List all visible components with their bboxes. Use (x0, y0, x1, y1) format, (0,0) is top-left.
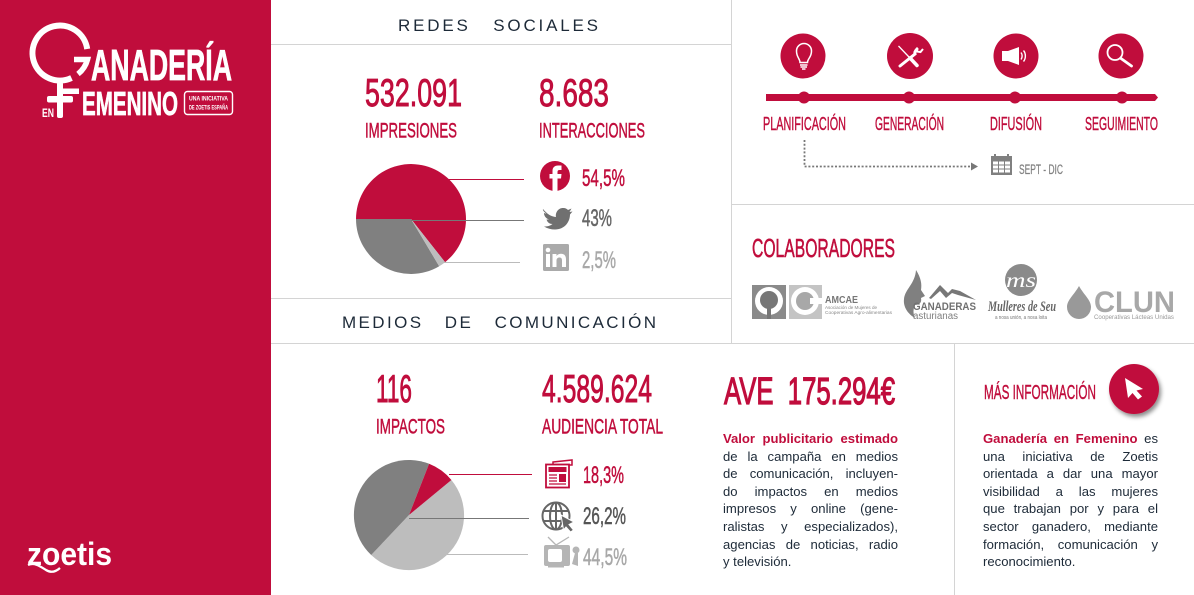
heading: medios de comunicación: MEDIOS DE COMUNICACIÓN (342, 313, 656, 332)
icon: tools (898, 46, 923, 66)
value: online: 26,2% (583, 503, 626, 530)
logo: AMCAE: Cooperativas Agro-alimentarias (825, 310, 893, 315)
icon: twitter (543, 208, 572, 230)
logo: Mulleres de Seu: ms (1006, 270, 1036, 292)
text: más información: visibilidad a las mujeres (983, 484, 1158, 499)
timeline labels: GENERACIÓN (875, 113, 944, 134)
icon: facebook (540, 161, 570, 191)
logo: Mulleres de Seu: a nosa unión, a nosa loita (995, 315, 1047, 321)
stat: impresiones (365, 72, 462, 142)
heading: redes sociales: REDES SOCIALES (398, 16, 598, 35)
text: valor publicitario: Valor publicitario estimado (723, 431, 898, 446)
logo: Mulleres de Seu (987, 264, 1056, 321)
logo: Ganadería en Femenino: EN (42, 106, 54, 120)
logo: Ganadería en Femenino: EMENINO (82, 85, 178, 122)
pie chart: medios de comunicación (354, 460, 532, 570)
logo: AMCAE (752, 285, 893, 319)
logo: Ganaderas asturianas: GANADERAS (913, 301, 976, 313)
logo: Mulleres de Seu: Mulleres de Seu (987, 299, 1056, 315)
timeline labels (763, 113, 1158, 134)
heading: colaboradores: COLABORADORES (752, 233, 895, 263)
text: más información: Ganadería en Femenino es (983, 431, 1158, 446)
stat: audiencia total: AUDIENCIA TOTAL (542, 414, 663, 438)
stat: impactos: IMPACTOS (376, 414, 445, 438)
text: más información: sector ganadero, mediante (983, 519, 1158, 534)
value: prensa: 18,3% (583, 462, 624, 489)
stat: impactos: 116 (376, 368, 412, 411)
text: más información: reconocimiento. (983, 554, 1075, 569)
stat: interacciones (539, 72, 645, 142)
logo: Ganaderas asturianas: asturianas (913, 311, 958, 322)
stat: interacciones: 8.683 (539, 72, 609, 115)
pie chart: redes sociales (356, 164, 524, 274)
text: más información: una iniciativa de Zoetis (983, 449, 1158, 464)
icon: speaker (1002, 47, 1025, 65)
timeline (766, 33, 1158, 104)
timeline labels: PLANIFICACIÓN (763, 113, 846, 134)
logo: Ganadería en Femenino: UNA INICIATIVA (189, 96, 228, 102)
logo: Ganaderas asturianas (904, 270, 976, 322)
text: más información (983, 431, 1158, 569)
button: cursor (1109, 364, 1159, 414)
stat: interacciones: INTERACCIONES (539, 118, 645, 142)
logo: AMCAE: Asociación de Mujeres de (825, 305, 877, 310)
logo: CLUN: Cooperativas Lácteas Unidas (1094, 315, 1174, 321)
heading: más información: MÁS INFORMACIÓN (984, 381, 1096, 404)
text: valor publicitario: y televisión. (723, 554, 791, 569)
text: más información: formación, comunicación y (983, 537, 1158, 552)
text: dates: SEPT - DIC (1019, 162, 1063, 177)
text: más información: orientada a dar una mayor (983, 466, 1158, 481)
text: valor publicitario: impresos y online (gene- (723, 501, 898, 516)
stat: impactos (376, 368, 445, 438)
stat: audiencia total: 4.589.624 (542, 368, 652, 411)
icon: television and microphone (544, 537, 580, 568)
stat: impresiones: 532.091 (365, 72, 462, 115)
stat: audiencia total (542, 368, 663, 438)
text: valor publicitario (723, 431, 898, 569)
text: valor publicitario: do impactos en medios (723, 484, 898, 499)
logo: CLUN: CLUN (1094, 286, 1175, 319)
logo: CLUN (1067, 286, 1175, 321)
logo: AMCAE: AMCAE (825, 295, 858, 306)
icon: globe with cursor (542, 502, 574, 532)
text: más información: que trabajan por y para el (983, 501, 1158, 516)
icon: newspaper (546, 460, 572, 488)
value: twitter: 43% (582, 205, 612, 232)
sidebar panel (0, 0, 271, 595)
text: valor publicitario: de la campaña en medios (723, 449, 898, 464)
arrow: dotted to dates (804, 140, 978, 170)
icon: linkedin (543, 244, 569, 271)
timeline labels: DIFUSIÓN (990, 113, 1042, 134)
logo: Ganadería en Femenino (32, 26, 233, 122)
stat: impresiones: IMPRESIONES (365, 118, 457, 142)
logo: Ganadería en Femenino: DE ZOETIS ESPAÑA (189, 102, 228, 112)
logo: Ganadería en Femenino: ANADERÍA (91, 40, 232, 90)
text: valor publicitario: agencias de noticias, radio (723, 537, 898, 552)
logo: zoetis: zoetis (27, 536, 112, 572)
icon: calendar (991, 154, 1012, 175)
value: linkedin: 2,5% (582, 247, 616, 274)
icon: light bulb (796, 44, 812, 69)
value: televisión: 44,5% (583, 544, 627, 571)
value: facebook: 54,5% (582, 165, 625, 192)
text: valor publicitario: de comunicación, incluyen- (723, 466, 898, 481)
text: valor publicitario: ralistas y especializados), (723, 519, 898, 534)
stat: AVE: AVE 175.294€ (724, 371, 895, 413)
icon: magnifier (1108, 45, 1132, 66)
